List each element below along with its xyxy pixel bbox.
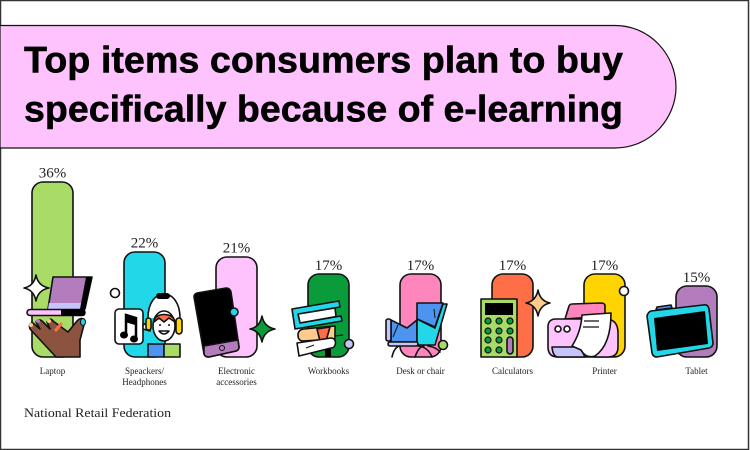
item: laptop: Laptop — [40, 366, 66, 376]
item: workbooks: 17% — [315, 258, 342, 274]
icon: books — [292, 301, 343, 357]
icon: dot — [344, 340, 354, 348]
icon: tablet — [647, 305, 713, 357]
icon: dot — [110, 288, 120, 298]
icon: sparkle — [24, 275, 49, 301]
item: printer: Printer — [592, 366, 617, 376]
item: calculators — [481, 258, 550, 376]
item: speakers: Speackers/ — [125, 366, 164, 376]
item: workbooks: Workbooks — [308, 366, 350, 376]
icon: calculator — [481, 299, 517, 357]
icon: phone — [194, 288, 239, 357]
item: electronic accessories: Electronic — [218, 366, 255, 376]
icon: sparkle — [250, 316, 275, 342]
item: speakers: 22% — [131, 236, 158, 252]
item: tablet: 15% — [683, 270, 710, 286]
item: tablet: Tablet — [685, 366, 708, 376]
icon: music note — [115, 309, 150, 344]
item: desk or chair: Desk or chair — [396, 366, 445, 376]
icon: laptop — [27, 277, 92, 316]
icon: person with headphones — [146, 293, 182, 357]
title — [24, 40, 623, 130]
item: printer — [548, 258, 628, 376]
item: laptop — [24, 166, 92, 376]
item: desk or chair: 17% — [407, 258, 434, 274]
item: electronic accessories: accessories — [216, 377, 257, 387]
title: specifically because of e-learning — [24, 88, 623, 130]
item: printer: 17% — [591, 258, 618, 274]
item: desk or chair — [386, 258, 448, 376]
item: laptop: 36% — [39, 166, 66, 182]
item: speakers: Headphones — [122, 377, 167, 387]
icon: chair — [386, 303, 447, 357]
icon: dot — [230, 308, 238, 316]
icon: dot — [438, 340, 448, 350]
title banner — [0, 26, 676, 148]
item: electronic accessories — [194, 240, 275, 387]
item: calculators: Calculators — [492, 366, 533, 376]
icon: printer — [548, 303, 618, 357]
item: tablet — [647, 270, 717, 376]
item: calculators: 17% — [499, 258, 526, 274]
icon: sparkle — [526, 290, 550, 316]
item: electronic accessories: 21% — [223, 240, 250, 256]
item: workbooks — [292, 258, 354, 376]
icon: dot — [620, 286, 628, 296]
title: Top items consumers plan to buy — [24, 40, 623, 80]
icon: hand — [29, 318, 86, 357]
item: speakers — [110, 236, 182, 387]
source: National Retail Federation — [24, 405, 172, 420]
